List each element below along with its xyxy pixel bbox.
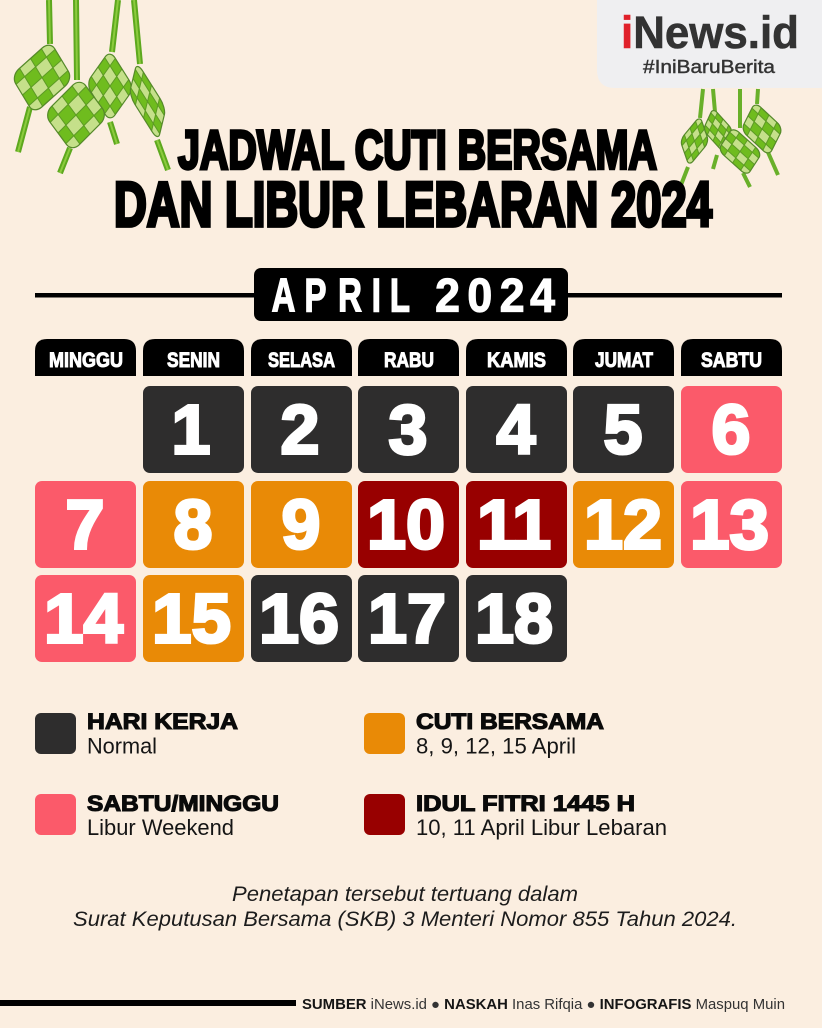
calendar grid: 1 xyxy=(172,390,210,468)
weekday headers: JUMAT xyxy=(595,349,653,372)
calendar grid: 15 xyxy=(152,580,231,658)
weekday headers: SABTU xyxy=(701,349,762,372)
month banner: APRIL xyxy=(272,269,410,322)
calendar grid: 11 xyxy=(477,486,551,564)
icon: ketupat cluster right xyxy=(680,89,783,187)
calendar grid: 12 xyxy=(584,486,662,564)
weekday headers: KAMIS xyxy=(487,349,546,372)
legend: hari kerja xyxy=(35,709,238,758)
calendar grid: 7 xyxy=(66,486,104,564)
legend: sabtu minggu: SABTU/MINGGU xyxy=(87,791,279,816)
logo tagline: #IniBaruBerita xyxy=(643,57,776,77)
panel: logo xyxy=(597,0,822,88)
calendar grid: 17 xyxy=(368,580,446,658)
weekday headers: SELASA xyxy=(268,349,335,372)
calendar grid: 18 xyxy=(475,580,553,658)
calendar grid: 3 xyxy=(389,390,427,468)
footer credits: SUMBER iNews.id ● NASKAH Inas Rifqia ● INFOGRAFIS Maspuq Muin xyxy=(302,997,785,1013)
legend: sabtu minggu: Libur Weekend xyxy=(87,815,234,840)
legend: idul fitri: IDUL FITRI 1445 H xyxy=(416,791,635,816)
weekday headers: RABU xyxy=(384,349,434,372)
calendar grid: 14 xyxy=(44,580,123,658)
calendar grid: 16 xyxy=(259,580,339,658)
calendar grid: 6 xyxy=(712,390,750,468)
calendar grid: 5 xyxy=(604,390,642,468)
legend: sabtu minggu xyxy=(35,791,279,840)
icon: ketupat cluster left xyxy=(11,0,168,173)
month banner: 2024 xyxy=(435,269,555,322)
title xyxy=(114,118,712,240)
legend: hari kerja: HARI KERJA xyxy=(87,709,238,734)
note text xyxy=(73,883,737,931)
legend: hari kerja: Normal xyxy=(87,734,157,758)
legend: cuti bersama: 8, 9, 12, 15 April xyxy=(416,734,576,758)
month banner xyxy=(35,268,782,322)
calendar grid: 10 xyxy=(367,486,445,564)
note text: Penetapan tersebut tertuang dalam xyxy=(232,883,578,906)
weekday headers xyxy=(35,339,782,376)
calendar grid xyxy=(35,386,782,662)
calendar grid: 4 xyxy=(497,390,536,468)
note text: Surat Keputusan Bersama (SKB) 3 Menteri Nomor 855 Tahun 2024. xyxy=(73,908,737,931)
logo wordmark: iNews.id xyxy=(621,7,799,58)
legend: cuti bersama: CUTI BERSAMA xyxy=(416,709,604,734)
footer credits xyxy=(0,997,785,1013)
calendar grid: 8 xyxy=(174,486,212,564)
weekday headers: SENIN xyxy=(167,349,220,372)
calendar grid: 13 xyxy=(690,486,769,564)
legend: cuti bersama xyxy=(364,709,604,758)
calendar grid: 2 xyxy=(281,390,319,468)
calendar grid: 9 xyxy=(282,486,320,564)
legend: idul fitri: 10, 11 April Libur Lebaran xyxy=(416,815,667,840)
weekday headers: MINGGU xyxy=(49,349,123,372)
legend: idul fitri xyxy=(364,791,667,840)
